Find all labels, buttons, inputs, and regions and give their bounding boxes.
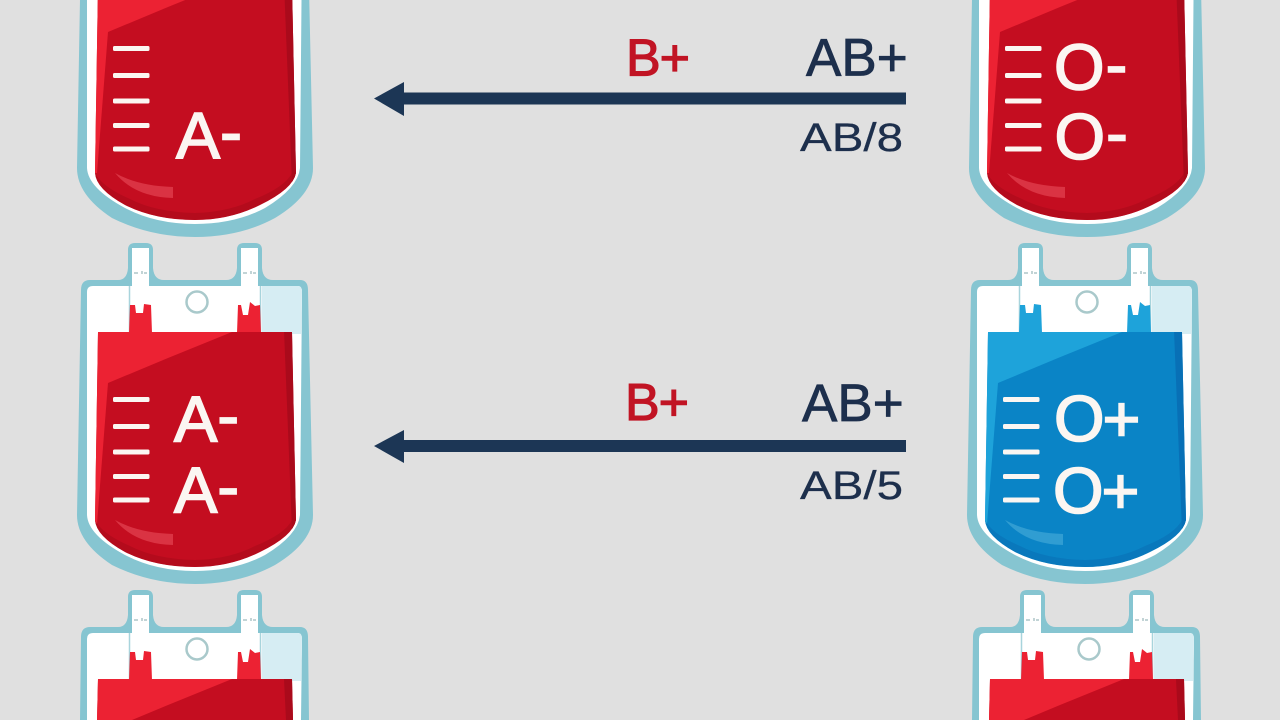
label: AB/5: AB/5 — [800, 464, 903, 508]
label: B+: B+ — [626, 30, 689, 88]
blood bag: O+ O+ middle right — [967, 243, 1203, 584]
blood bag: bottom right (cropped) — [972, 590, 1201, 720]
blood bag: O- top right: - — [1106, 96, 1129, 169]
blood bag: A- A- middle left: - — [217, 378, 239, 452]
blood bag: O- top right: O — [1054, 100, 1106, 173]
label: AB+: AB+ — [802, 374, 904, 433]
blood bag: A- top left: A — [176, 98, 220, 172]
arrow row 1 — [374, 28, 908, 160]
arrow pointing left — [374, 430, 906, 463]
blood bag: A- A- middle left: - — [217, 450, 239, 522]
blood bag: A- A- middle left — [77, 243, 313, 584]
blood bag: A- top left — [77, 0, 313, 237]
blood bag: O- top right: O — [1054, 30, 1106, 104]
arrow pointing left — [374, 82, 906, 116]
label: AB/8: AB/8 — [800, 116, 903, 160]
label: AB+: AB+ — [806, 28, 908, 88]
label: B+: B+ — [625, 374, 688, 432]
blood bag: O- top right — [969, 0, 1205, 237]
blood bag: A- top left: - — [220, 94, 242, 168]
blood bag: O+ O+ middle right: O+ — [1054, 382, 1139, 455]
blood bag: O+ O+ middle right: O+ — [1053, 454, 1138, 527]
blood bag: A- A- middle left: A — [174, 454, 217, 526]
blood bag: bottom left (cropped) — [80, 590, 309, 720]
blood bag: A- A- middle left: A — [174, 382, 217, 456]
arrow row 2 — [374, 374, 906, 508]
blood bag: O- top right: - — [1106, 28, 1128, 100]
